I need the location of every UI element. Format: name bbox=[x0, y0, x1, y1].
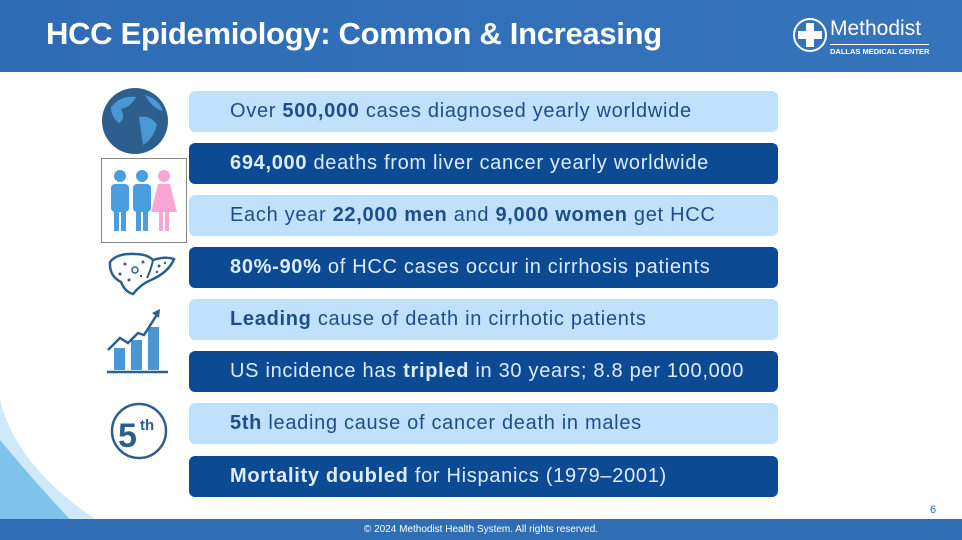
icon: 5th: th bbox=[140, 417, 154, 434]
logo: Methodist bbox=[830, 17, 921, 40]
fact box 1 bbox=[189, 91, 778, 132]
icon: globe bbox=[102, 88, 168, 154]
fact box 2 bbox=[189, 143, 778, 184]
fact box 8: Mortality doubled for Hispanics (1979–2001) bbox=[230, 465, 667, 487]
fact box 2: 694,000 deaths from liver cancer yearly worldwide bbox=[230, 152, 709, 174]
fact box 7: 5th leading cause of cancer death in males bbox=[230, 412, 642, 434]
left swoosh decoration bbox=[0, 400, 95, 519]
footer: © 2024 Methodist Health System. All rights reserved. bbox=[364, 524, 598, 535]
logo: DALLAS MEDICAL CENTER bbox=[830, 47, 929, 56]
page number: 6 bbox=[930, 504, 936, 516]
fact box 3 bbox=[189, 195, 778, 236]
icon: 5th bbox=[110, 402, 168, 460]
icon: liver bbox=[108, 252, 176, 296]
fact box 5 bbox=[189, 299, 778, 340]
fact box 8 bbox=[189, 456, 778, 497]
fact box 4 bbox=[189, 247, 778, 288]
title: HCC Epidemiology: Common & Increasing bbox=[46, 16, 662, 51]
fact box 6 bbox=[189, 351, 778, 392]
fact box 1: Over 500,000 cases diagnosed yearly worldwide bbox=[230, 100, 692, 122]
icon: rising chart bbox=[107, 309, 168, 374]
fact box 4: 80%-90% of HCC cases occur in cirrhosis patients bbox=[230, 256, 710, 278]
icon: 5th: 5 bbox=[118, 417, 137, 455]
fact box 3: Each year 22,000 men and 9,000 women get HCC bbox=[230, 204, 716, 226]
icon: people bbox=[101, 158, 187, 243]
fact box 5: Leading cause of death in cirrhotic patients bbox=[230, 308, 647, 330]
fact box 6: US incidence has tripled in 30 years; 8.8 per 100,000 bbox=[230, 360, 744, 382]
logo bbox=[793, 17, 930, 56]
fact box 7 bbox=[189, 403, 778, 444]
footer bbox=[0, 519, 962, 540]
header bar bbox=[0, 0, 962, 72]
